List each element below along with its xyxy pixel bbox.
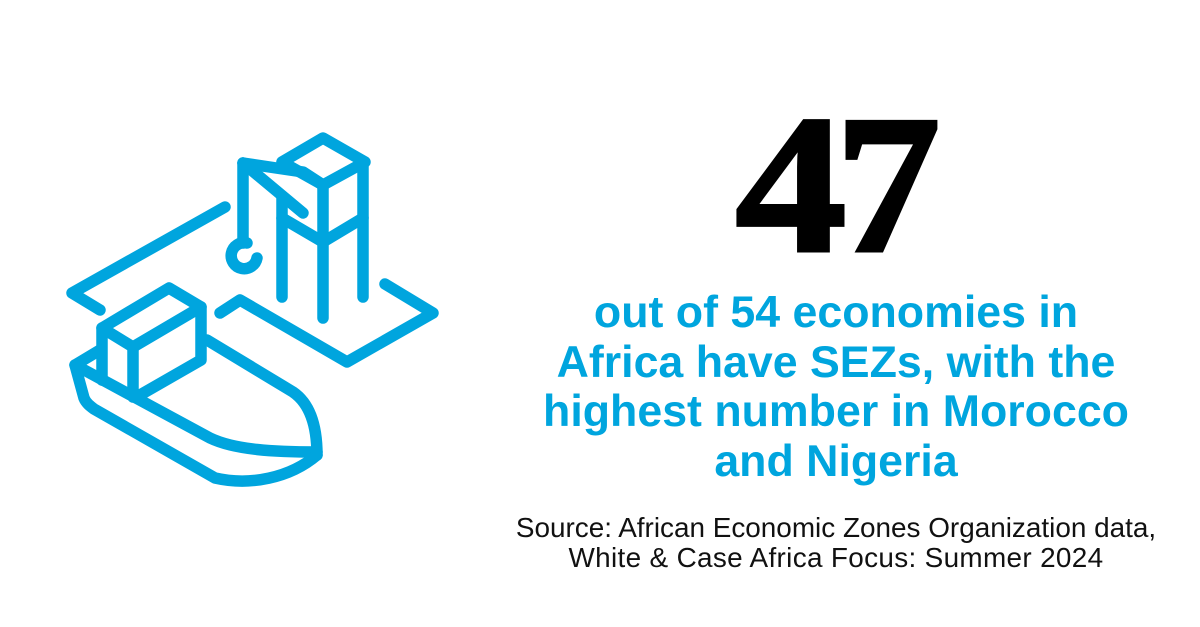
big number 47 bbox=[735, 75, 941, 294]
description line 1: out of 54 economies in bbox=[594, 288, 1078, 337]
description line 2: Africa have SEZs, with the bbox=[557, 338, 1115, 387]
tower with cube bbox=[282, 138, 365, 318]
text block: description and source bbox=[516, 288, 1156, 573]
description line 3: highest number in Morocco bbox=[543, 387, 1129, 436]
source line 1: Source: African Economic Zones Organization data, bbox=[516, 512, 1156, 543]
crane and hook bbox=[231, 163, 323, 269]
source line 2: White & Case Africa Focus: Summer 2024 bbox=[569, 542, 1103, 573]
icon: ship and dock crane bbox=[66, 132, 439, 487]
dock outline bbox=[72, 207, 433, 362]
big number 47: 7 bbox=[835, 75, 941, 294]
big number 47: 4 bbox=[735, 75, 846, 294]
ship with container bbox=[75, 288, 317, 481]
description line 4: and Nigeria bbox=[714, 437, 958, 486]
